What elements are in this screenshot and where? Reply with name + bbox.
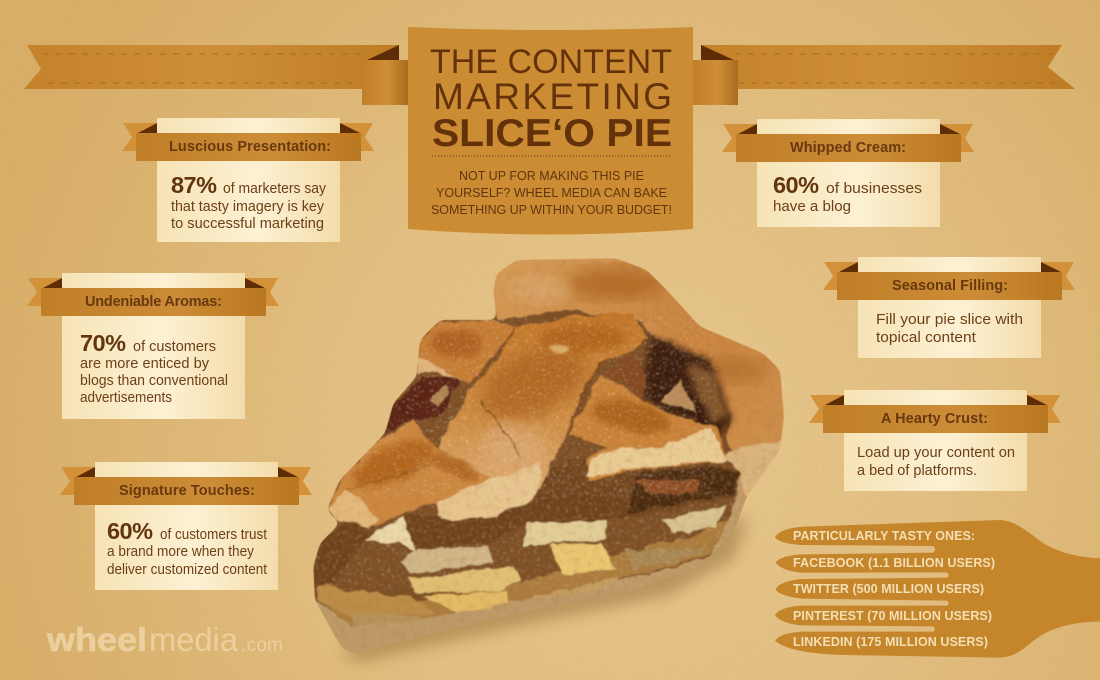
left header ribbon: [24, 45, 408, 105]
apple pieces: [317, 507, 727, 627]
ribbon and paper: [722, 119, 974, 227]
wheelmedia logo: .com: [241, 635, 283, 656]
body text: [857, 445, 1015, 479]
sugar speckle on lattice: [350, 317, 717, 497]
bottom crust: [316, 475, 746, 653]
body text: to successful marketing: [171, 216, 324, 232]
panel shape: [408, 27, 693, 234]
platform list: PARTICULARLY TASTY ONES:: [793, 529, 975, 543]
nut and oat filling: [307, 457, 742, 588]
heading: Luscious Presentation:: [169, 139, 331, 155]
title: THE CONTENT: [430, 43, 672, 81]
subtitle: YOURSELF? WHEEL MEDIA CAN BAKE: [436, 186, 667, 200]
back rim crust: [493, 258, 784, 499]
body text: [773, 172, 922, 215]
heading: Signature Touches:: [119, 483, 255, 499]
body text: [171, 172, 327, 232]
body text: of customers trust: [160, 527, 267, 543]
right lattice strip: [570, 373, 728, 480]
subtitle: [431, 169, 672, 217]
body text: 60%: [773, 172, 819, 198]
back-left lattice strip: [417, 320, 517, 383]
pie body: [313, 258, 784, 652]
body text: 70%: [80, 330, 126, 356]
ribbon and paper: [60, 462, 312, 590]
crust shard: [363, 517, 415, 550]
body text: advertisements: [80, 390, 172, 406]
body text: are more enticed by: [80, 356, 210, 372]
body text: 87%: [171, 172, 217, 198]
wheelmedia logo: [46, 621, 283, 658]
dark cavity: [643, 337, 732, 437]
card: Seasonal Filling: [823, 257, 1075, 358]
crust grain overlay: [336, 262, 778, 647]
fork shape: [775, 520, 1100, 658]
wheelmedia logo: wheel: [46, 621, 147, 658]
body text: of businesses: [826, 181, 922, 197]
body text: [107, 518, 267, 578]
body text: that tasty imagery is key: [171, 199, 325, 215]
ribbon and paper: [809, 390, 1061, 491]
subtitle: SOMETHING UP WITHIN YOUR BUDGET!: [431, 203, 672, 217]
body text: 60%: [107, 518, 153, 544]
subtitle: NOT UP FOR MAKING THIS PIE: [459, 169, 644, 183]
fork with platform list: [775, 520, 1100, 658]
body text: [876, 312, 1023, 346]
body text: of customers: [133, 339, 216, 355]
body text: Fill your pie slice with: [876, 312, 1023, 328]
platform list: FACEBOOK (1.1 BILLION USERS): [793, 556, 995, 570]
pie slice illustration: [313, 258, 784, 666]
heading: Seasonal Filling:: [892, 278, 1008, 294]
pie shadow: [340, 517, 750, 662]
card: Undeniable Aromas: [27, 273, 279, 419]
body text: a brand more when they: [107, 544, 255, 560]
body text: blogs than conventional: [80, 373, 228, 389]
heading: Undeniable Aromas:: [85, 294, 222, 310]
title: SLICE‘O PIE: [432, 112, 672, 155]
body text: topical content: [876, 330, 976, 346]
platform list: [793, 529, 995, 649]
title: [430, 43, 672, 155]
card: Whipped Cream: [722, 119, 974, 227]
ribbon and paper: [27, 273, 279, 419]
ribbon and paper: [823, 257, 1075, 358]
title: MARKETING: [433, 76, 672, 117]
card: Luscious Presentation: [122, 118, 374, 242]
platform list: LINKEDIN (175 MILLION USERS): [793, 635, 988, 649]
body text: have a blog: [773, 199, 851, 215]
platform list: TWITTER (500 MILLION USERS): [793, 582, 984, 596]
card: A Hearty Crust: [809, 390, 1061, 491]
ribbon and paper: [122, 118, 374, 242]
body text: Load up your content on: [857, 445, 1015, 461]
heading: Whipped Cream:: [790, 140, 906, 156]
right header ribbon: [693, 45, 1075, 105]
body text: deliver customized content: [107, 562, 267, 578]
front lattice triangle: [327, 418, 492, 528]
card: Signature Touches: [60, 462, 312, 590]
body text: of marketers say: [223, 181, 327, 197]
heading: A Hearty Crust:: [881, 411, 988, 427]
body text: a bed of platforms.: [857, 463, 977, 479]
body text: [80, 330, 228, 406]
platform list: PINTEREST (70 MILLION USERS): [793, 609, 992, 623]
main lattice strip: [433, 313, 648, 517]
wheelmedia logo: media: [149, 621, 239, 658]
title panel: [408, 27, 693, 234]
nut pieces behind lattice: [385, 372, 460, 433]
